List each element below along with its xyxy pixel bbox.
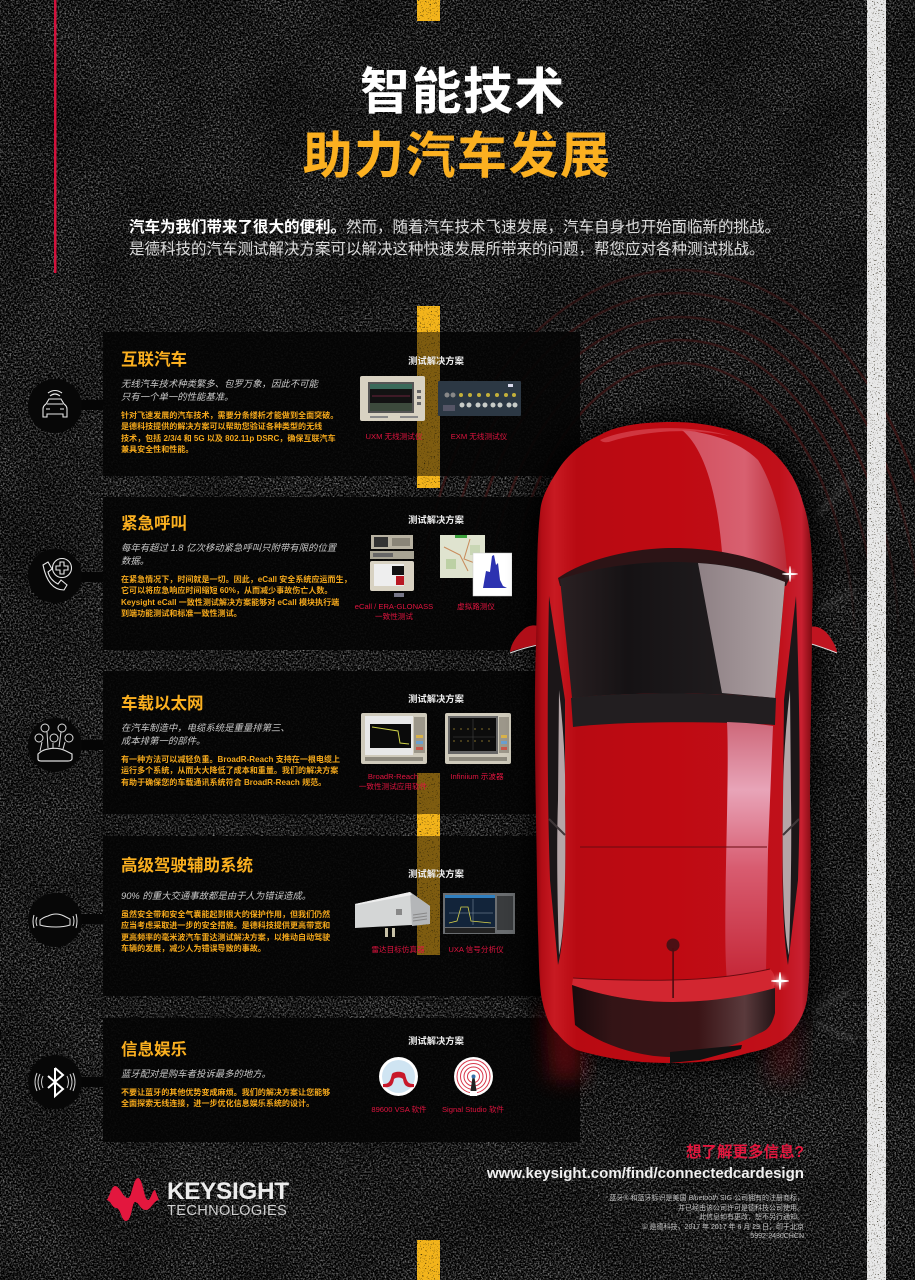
left side window <box>548 596 565 965</box>
heading: ADAS: 高级驾驶辅助系统 <box>121 857 253 875</box>
solutions heading: 测试解决方案 <box>408 515 464 525</box>
rear window <box>572 985 775 1057</box>
red accent line <box>54 0 56 273</box>
heading: connected car: 互联汽车 <box>121 351 187 369</box>
body text: 兼具安全性和性能。 <box>121 445 193 454</box>
solutions heading: 测试解决方案 <box>408 356 464 366</box>
label: virtual drive test: 虚拟路测仪 <box>457 602 495 611</box>
Keysight logo <box>106 1178 289 1221</box>
label: eCall: 一致性测试 <box>375 612 413 620</box>
body text: 针对飞速发展的汽车技术，需要分条缕析才能做到全面突破。 <box>121 411 338 420</box>
label: EXM: EXM 无线测试仪 <box>451 432 507 441</box>
legal note: 并已经由该公司许可是德科技公司使用。 <box>678 1205 804 1212</box>
body text <box>121 1088 330 1108</box>
label: Infiniium: Infiniium 示波器 <box>450 772 504 781</box>
body text: 到端功能测试和标准一致性测试。 <box>121 609 242 618</box>
body text: 在紧急情况下，时间就是一切。因此，eCall 安全系统应运而生， <box>121 575 352 584</box>
sub-wordmark: TECHNOLOGIES <box>167 1203 287 1219</box>
logo mark <box>106 1178 159 1221</box>
icon: ADAS car <box>28 893 82 947</box>
intro text: 是德科技的汽车测试解决方案可以解决这种快速发展所带来的问题，帮您应对各种测试挑战。 <box>129 241 765 258</box>
call to action <box>486 1144 804 1182</box>
instrument: EXM wireless test set <box>438 381 521 416</box>
car illustration <box>510 403 856 1091</box>
instrument: eCall stack <box>370 535 414 597</box>
lead text <box>121 542 337 566</box>
label: UXM: UXM 无线测试仪 <box>366 432 422 441</box>
panel: connected car <box>103 332 580 476</box>
windshield reflection <box>698 563 785 698</box>
label: Signal Studio: Signal Studio 软件 <box>442 1105 504 1114</box>
white edge line <box>867 0 886 1280</box>
instrument: BroadR-Reach scope <box>361 713 427 764</box>
lead text: 只有一个单一的性能基准。 <box>121 390 234 402</box>
body text: 有一种方法可以减轻负重。BroadR-Reach 支持在一根电缆上 <box>121 755 340 764</box>
antenna <box>666 938 680 998</box>
heading: eCall: 紧急呼叫 <box>121 515 187 533</box>
instrument: Infiniium oscilloscope <box>445 713 511 764</box>
body text: 它可以将应急响应时间缩短 60%，从而减少事故伤亡人数。 <box>121 586 332 595</box>
label: UXA: UXA 信号分析仪 <box>448 945 504 954</box>
centre line dashes <box>417 0 440 1280</box>
lead text: 蓝牙配对是购车者投诉最多的地方。 <box>121 1068 271 1078</box>
body text: 虽然安全带和安全气囊能起到很大的保护作用，但我们仍然 <box>121 910 330 919</box>
icon: Signal Studio software <box>454 1057 493 1096</box>
body text <box>121 410 338 454</box>
body text: 更高频率的毫米波汽车雷达测试解决方案，以推动自动驾驶 <box>121 933 330 942</box>
body text: 全面探索无线连接，进一步优化信息娱乐系统的设计。 <box>121 1099 314 1108</box>
label: BroadR-Reach: 一致性测试应用软件 <box>359 782 427 790</box>
solutions heading: 测试解决方案 <box>408 869 464 879</box>
highlights <box>771 566 798 990</box>
lead text: 在汽车制造中，电缆系统是重量排第三、 <box>121 722 290 732</box>
icon: connected car <box>28 379 82 433</box>
intro text: 汽车为我们带来了很大的便利。然而，随着汽车技术飞速发展，汽车自身也开始面临新的挑战。 <box>129 219 780 236</box>
roof reflection <box>725 722 773 980</box>
URL: www.keysight.com/find/connectedcardesign <box>487 1165 804 1182</box>
question: 想了解更多信息? <box>686 1144 804 1161</box>
label: 89600 VSA: 89600 VSA 软件 <box>371 1105 427 1114</box>
legal note <box>609 1194 804 1240</box>
instrument: virtual drive test <box>440 535 512 596</box>
lead text: 成本排第一的部件。 <box>121 734 205 746</box>
title: 助力汽车发展 <box>302 128 612 184</box>
label: BroadR-Reach <box>359 772 427 790</box>
title <box>302 64 612 184</box>
panel: infotainment <box>103 1018 580 1142</box>
label: eCall: eCall / ERA-GLONASS <box>355 602 433 611</box>
body text: 技术，包括 2/3/4 和 5G 以及 802.11p DSRC，确保互联汽车 <box>121 434 336 443</box>
roof band <box>571 694 776 727</box>
instrument: radar target simulator <box>355 892 430 937</box>
label: radar target simulator: 雷达目标仿真器 <box>371 945 425 954</box>
panel: ADAS <box>103 836 580 996</box>
icon: Bluetooth <box>28 1055 82 1109</box>
rear wiper <box>670 1045 742 1063</box>
car body <box>535 422 813 1063</box>
icon: emergency call <box>28 549 82 603</box>
wordmark: KEYSIGHT <box>167 1178 289 1205</box>
legal note: 蓝牙® 和蓝牙标识是美国 Bluetooth SIG 公司拥有的注册商标， <box>609 1195 804 1202</box>
hood highlights <box>600 428 787 572</box>
label: BroadR-Reach: BroadR-Reach <box>368 772 418 781</box>
right side window <box>783 596 800 965</box>
windshield <box>560 562 785 698</box>
legal note: 5992-2430CHCN <box>750 1233 804 1240</box>
body text: 运行多个系统，从而大大降低了成本和重量。我们的解决方案 <box>121 766 338 775</box>
body text <box>121 910 330 953</box>
solutions heading: 测试解决方案 <box>408 1036 464 1046</box>
heading: infotainment: 信息娱乐 <box>121 1041 187 1059</box>
body text: Keysight eCall 一致性测试解决方案能够对 eCall 模块执行端 <box>121 598 339 607</box>
body text: 不要让蓝牙的其他优势变成麻烦。我们的解决方案让您能够 <box>121 1088 330 1097</box>
panel: eCall <box>103 497 580 650</box>
lead text: 每年有超过 1.8 亿次移动紧急呼叫只附带有限的位置 <box>121 542 336 552</box>
lead text: 无线汽车技术种类繁多、包罗万象，因此不可能 <box>121 378 318 388</box>
icon: ethernet car <box>28 718 82 772</box>
icon: 89600 VSA software <box>379 1057 418 1096</box>
legal note: © 是德科技，2017 年 2017 年 6 月 29 日，印于北京 <box>642 1224 804 1231</box>
ground shadow, light streaks and red glow <box>526 414 856 1080</box>
solutions heading: 测试解决方案 <box>408 694 464 704</box>
rear deck strip <box>572 969 775 1002</box>
body text: 应当考虑采取进一步的安全措施。是德科技提供更高带宽和 <box>121 921 330 930</box>
instrument: UXA signal analyzer <box>443 893 515 934</box>
body text <box>121 574 352 618</box>
cowl <box>558 548 791 586</box>
label: eCall <box>355 602 433 620</box>
body text: 是德科技提供的解决方案可以帮助您验证各种类型的无线 <box>121 422 322 431</box>
legal note: 此信息如有更改，恕不另行通知。 <box>699 1214 804 1221</box>
lead text <box>121 722 290 746</box>
panel: automotive ethernet <box>103 671 580 814</box>
lead text: 数据。 <box>121 554 149 566</box>
heading: ethernet: 车载以太网 <box>121 695 204 713</box>
connector bars <box>82 400 103 1087</box>
title: 智能技术 <box>360 64 566 120</box>
body text: 车辆的发展，减少人为错误导致的事故。 <box>121 944 266 953</box>
mirrors <box>510 625 837 653</box>
body text: 有助于确保您的车载通讯系统符合 BroadR-Reach 规范。 <box>121 778 326 787</box>
intro text <box>129 218 780 258</box>
body text <box>121 754 340 787</box>
lead text <box>121 378 319 402</box>
lead text: 90% 的重大交通事故都是由于人为错误造成。 <box>121 890 311 900</box>
instrument: UXM wireless test set <box>360 376 425 421</box>
hatch seam <box>580 846 767 848</box>
